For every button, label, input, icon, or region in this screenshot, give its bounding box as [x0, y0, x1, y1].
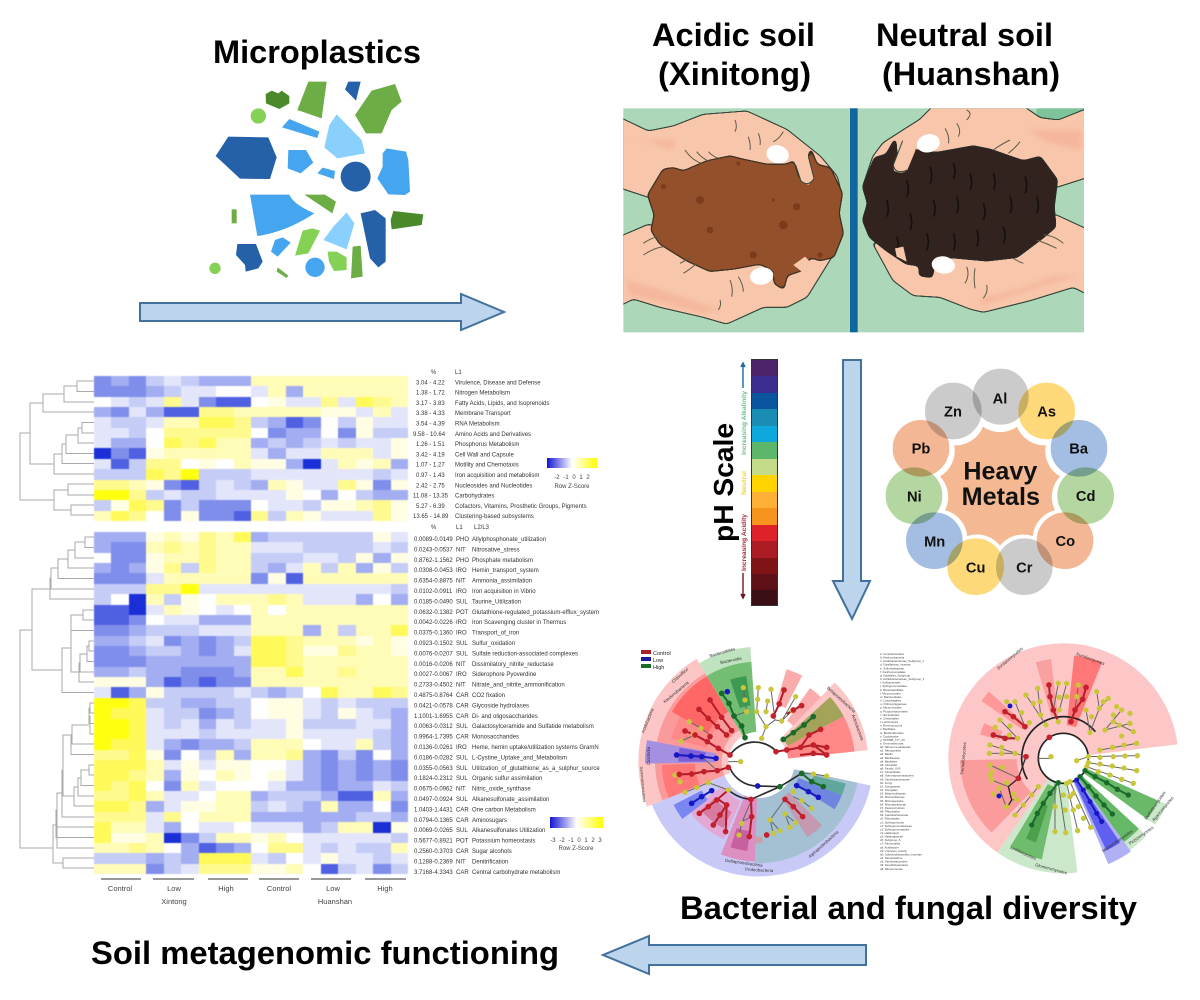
heatmap row labels: subsystems: CO2 fixation: [472, 693, 505, 699]
heatmap row labels: L1: L1: [456, 525, 463, 531]
heatmap row labels: subsystems: Alkanesulfonates Utilization: [472, 828, 545, 834]
heatmap bottom block: subsystem levels: [93, 531, 409, 875]
heatmap row labels: subsystems: 1.0403-1.4431: [414, 807, 453, 813]
cladogram: sector labels: Proteobacteria: [745, 867, 774, 873]
cladogram: sector labels: Bacteroidia: [720, 655, 743, 665]
taxa key list: c7: Nitrosotalea: [880, 842, 900, 846]
taxa key list: b0: Fungi: [880, 781, 892, 785]
taxa key list: c: Acidobacteriaceae_Subgroup_1: [880, 659, 924, 663]
taxa key list: b9: Caulobacteraceae: [880, 813, 909, 817]
metal symbols: Al: [993, 391, 1007, 407]
taxa key list: b7: Pedomicrobium: [880, 806, 905, 810]
heatmap row labels: subsystems: 0.4875-0.8764: [414, 693, 453, 699]
heatmap row labels: subsystems: SUL: [456, 724, 468, 730]
heatmap row labels: subsystems: Potassium homeostasis: [472, 839, 535, 845]
taxa key list: c8: Acidibacter: [880, 845, 899, 849]
heatmap row labels: L1: 13.65 - 14.89: [413, 514, 449, 520]
heatmap row labels: subsystems: 0.0923-0.1502: [414, 641, 453, 647]
heatmap row labels: subsystems: NIT: [456, 547, 466, 553]
heatmap row labels: L1: %: [431, 525, 437, 531]
heatmap row labels: subsystems: 0.0675-0.0962: [414, 787, 453, 793]
heatmap group axis and labels: Control: [108, 884, 132, 893]
heatmap row labels: subsystems: Transport_of_iron: [472, 631, 519, 637]
heatmap row labels: subsystems: 0.6354-0.8875: [414, 579, 453, 585]
heatmap row labels: subsystems: SUL: [456, 797, 468, 803]
neutral label: Neutral: [741, 471, 748, 495]
arrow: soil to bacterial diversity: [833, 360, 870, 619]
heatmap row labels: subsystems: Ammonia_assimilation: [472, 579, 532, 585]
heatmap group axis and labels: High: [218, 884, 234, 893]
taxa key list: a0: Nitrosomonadaceae: [880, 745, 911, 749]
heatmap row labels: subsystems: Siderophore Pyoverdine: [472, 672, 537, 678]
heatmap row labels: subsystems: CAR: [456, 703, 469, 709]
taxa key list: z: Gemmatimonas: [880, 742, 904, 746]
heatmap row labels: subsystems: Sulfate reduction-associated complexes: [472, 651, 578, 657]
heatmap row labels: subsystems: Allylphosphonate_utilization: [472, 537, 546, 543]
heatmap row labels: subsystems: 0.2560-0.3703: [414, 849, 453, 855]
heatmap row labels: L1: 3.04 - 4.22: [416, 380, 445, 386]
taxa key list: v: Bacillales: [880, 727, 896, 731]
taxa key list: k: Rhodospirillales: [880, 688, 904, 692]
heatmap row labels: subsystems: Organic sulfur assimilation: [472, 776, 542, 782]
taxa key list: c9: Unknown_Family: [880, 849, 907, 853]
soil: neutral: [863, 140, 1057, 277]
taxa key list: e: Sulfuritaleaceae: [880, 666, 904, 670]
heatmap row labels: subsystems: Sulfur_oxidation: [472, 641, 515, 647]
fungal cladogram sector labels: Tremellomycetes: [959, 742, 967, 775]
heatmap row labels: subsystems: 0.0186-0.0282: [414, 755, 453, 761]
taxa key list: b6: Micropepsaceae: [880, 802, 906, 806]
taxa key list: h: Acidobacteriaceae_Subgroup_3: [880, 677, 925, 681]
heatmap row labels: subsystems: Alkanesulfonate_assimilation: [472, 797, 549, 803]
cladogram: sector labels: Bacteroidetes: [709, 646, 736, 658]
arrow: acidity down: [741, 573, 745, 598]
heatmap row labels: subsystems: SUL: [456, 651, 468, 657]
taxa key list: b: Ktedonobacteria: [880, 656, 905, 660]
heatmap row labels: subsystems: Taurine_Utilization: [472, 599, 521, 605]
heatmap row labels: subsystems: CAR: [456, 807, 469, 813]
heatmap row labels: subsystems: One carbon Metabolism: [472, 807, 536, 813]
taxa key list: a5: Clostridia: [880, 763, 897, 767]
heatmap row labels: subsystems: 0.9964-1.7395: [414, 735, 453, 741]
heatmap row labels: L1: 0.97 - 1.43: [416, 473, 445, 479]
arrow: diversity to soil functioning: [603, 936, 866, 974]
heatmap row labels: L1: 3.38 - 4.33: [416, 411, 445, 417]
fungal cladogram sector labels: Mortierellomycetes: [1101, 829, 1134, 853]
cladogram: sector labels: Deltaproteobacteria: [725, 858, 764, 868]
cladogram: bacterial diversity: [647, 651, 869, 873]
diagram: heavy metals ring: [885, 368, 1115, 596]
heatmap row labels: subsystems: IRO: [456, 589, 467, 595]
heatmap row labels: subsystems: Denitrification: [472, 859, 508, 865]
taxa key list: n: Cytophagales: [880, 699, 901, 703]
taxa key list: c3: Sphingomonadales: [880, 827, 910, 831]
heatmap row labels: L1: Membrane Transport: [455, 411, 511, 417]
heatmap row labels: subsystems: IRO: [456, 672, 467, 678]
cladogram: sector labels: [639, 646, 865, 873]
heatmap group axis and labels: Control: [267, 884, 291, 893]
taxa key list: b4: Microscillaceae: [880, 795, 905, 799]
fungal cladogram sector labels: Pezizomycetes: [1128, 825, 1154, 846]
pH colour bar: [751, 359, 778, 606]
heatmap row labels: subsystems: Iron Scavenging cluster in Thermus: [472, 620, 566, 626]
metal symbols: Pb: [912, 442, 930, 458]
metal symbols: Cr: [1016, 561, 1033, 577]
heatmap row labels: subsystems: Monosaccharides: [472, 735, 519, 741]
heading: acidic soil: Acidic soil: [652, 17, 815, 53]
taxa key list: b3: Beijerinckiaceae: [880, 792, 906, 796]
heading: Huanshan: (Huanshan): [882, 56, 1060, 92]
heatmap row labels: L1: 5.27 - 6.39: [416, 504, 445, 510]
heatmap row labels: subsystems: SUL: [456, 766, 468, 772]
metal symbols: Zn: [944, 405, 962, 421]
heatmap row labels: L1: 1.38 - 1.72: [416, 391, 445, 397]
heatmap row labels: L1: 1.07 - 1.27: [416, 463, 445, 469]
taxa key list: l: Myxococcales: [880, 691, 901, 695]
heatmap row labels: subsystems: 0.0069-0.0265: [414, 828, 453, 834]
heading: soil metagenomic functioning: Soil metagenomic functioning: [91, 935, 559, 971]
heatmap row labels: subsystems: 0.1288-0.2369: [414, 859, 453, 865]
legend: control: Control: [653, 651, 671, 657]
heading: Xinitong: (Xinitong): [658, 56, 811, 92]
metal symbols: Co: [1056, 534, 1075, 550]
heatmap row labels: L1: 1.26 - 1.51: [416, 442, 445, 448]
taxa key list: a3: Bacillaceae: [880, 756, 900, 760]
left finger and nails: [788, 145, 814, 185]
taxa key list: d: Gaiellaceae_Incertae: [880, 663, 911, 667]
legend: low: Low: [653, 658, 663, 664]
heatmap row labels: subsystems: Galactosylceramide and Sulfatide metabolism: [472, 724, 594, 730]
heatmap row labels: subsystems: PHO: [456, 558, 469, 564]
taxa key list: c4: Haliangium: [880, 831, 900, 835]
taxa key list: d1: Pseudolabrys: [880, 856, 903, 860]
heatmap row labels: subsystems: NIT: [456, 579, 466, 585]
heading: neutral soil: Neutral soil: [876, 17, 1053, 53]
heatmap row labels: subsystems: 0.0497-0.0924: [414, 797, 453, 803]
heatmap row labels: subsystems: 0.0063-0.0312: [414, 724, 453, 730]
increasing alkalinity label: Increasing Alkalinity: [741, 391, 748, 455]
colour key: bottom heatmap: -3 -2 -1 0 1 2 3: [550, 838, 602, 844]
heatmap row labels: L1: Fatty Acids, Lipids, and Isoprenoids: [455, 401, 549, 407]
cladogram legend: [641, 650, 671, 671]
heatmap row labels: L1: L1: [455, 370, 462, 376]
heatmap row labels: subsystems: Glutathione-regulated_potassium-efflux_system: [472, 610, 599, 616]
heatmap row labels: subsystems: Dissimilatory_nitrite_reductase: [472, 662, 554, 668]
taxa key list: c6: Subgroup_6: [880, 838, 901, 842]
taxa key list: a: Coriobacteriales: [880, 652, 905, 656]
heatmap row labels: subsystems: CAR: [456, 735, 469, 741]
branches: [681, 688, 827, 835]
heatmap row labels: subsystems: 0.8762-1.1562: [414, 558, 453, 564]
heatmap row labels: L1: 3.42 - 4.19: [416, 452, 445, 458]
taxa key list: j: Sphingomonadales: [879, 684, 908, 688]
heatmap row labels: subsystems: 0.2733-0.4502: [414, 683, 453, 689]
heatmap row labels: subsystems: 0.0102-0.0911: [414, 589, 453, 595]
taxa key list: g: Gaiellales_Subgroup: [880, 673, 910, 677]
colour key: top heatmap: -2 -1 0 1 2: [554, 475, 590, 481]
taxa key list: c2: Sphingomonadaceae: [880, 824, 912, 828]
heatmap row labels: L1: Nitrogen Metabolism: [455, 391, 510, 397]
hand creases: [643, 110, 1063, 310]
taxa key list: c5: Haliangiaceae: [880, 835, 903, 839]
heavy metals label: Heavy: [963, 457, 1037, 485]
fungal cladogram sector labels: Sordariomycetes: [996, 646, 1024, 671]
heatmap row labels: L1: 3.17 - 3.83: [416, 401, 445, 407]
heatmap row labels: subsystems: 1.1001-1.6955: [414, 714, 453, 720]
heatmap row labels: subsystems: Aminosugars: [472, 818, 507, 824]
heatmap row labels: subsystems: Sugar alcohols: [472, 849, 512, 855]
colour key: bottom heatmap: Row Z-Score: [558, 846, 594, 852]
heatmap row labels: subsystems: 3.7168-4.3343: [414, 870, 453, 876]
heatmap row labels: L1: Iron acquisition and metabolism: [455, 473, 539, 479]
heatmap row labels: subsystems: NIT: [456, 787, 466, 793]
soil: acidic: [648, 150, 843, 288]
metal symbols: Ni: [907, 489, 922, 505]
heatmap row labels: subsystems: Phosphate metabolism: [472, 558, 533, 564]
cladogram: sector labels: Gemmatimonadetes: [639, 766, 647, 803]
fungal cladogram sector labels: [959, 646, 1175, 875]
heatmap row labels: subsystems: 0.0076-0.0207: [414, 651, 453, 657]
taxa key list: o: Chitinophagaceae: [880, 702, 907, 706]
heatmap row labels: L1: Nucleosides and Nucleotides: [455, 483, 532, 489]
cladogram: sector labels: Chloroflexi: [671, 667, 689, 684]
cladogram: fungal diversity: [910, 605, 1200, 911]
dendrogram: top heatmap rows: [20, 381, 94, 515]
heatmap row labels: subsystems: CAR: [456, 870, 469, 876]
colour key: top heatmap: Row Z-Score: [554, 484, 590, 490]
heatmap row labels: subsystems: POT: [456, 610, 469, 616]
colour key: top heatmap: [547, 458, 597, 490]
heatmap row labels: subsystems: IRO: [456, 620, 467, 626]
heatmap group axis and labels: Low: [167, 884, 181, 893]
heatmap row labels: subsystems: SUL: [456, 641, 468, 647]
pH scale: [708, 359, 778, 606]
cladogram: sector labels: Betaproteobacteria: [826, 685, 857, 714]
taxa key list: c1: Sphingomonas: [880, 820, 904, 824]
heatmap row labels: subsystems: 0.0421-0.0578: [414, 703, 453, 709]
heatmap row labels: L1: %: [431, 370, 437, 376]
heatmap row labels: subsystems: Iron acquisition in Vibrio: [472, 589, 536, 595]
heatmap row labels: subsystems: NIT: [456, 683, 466, 689]
taxa key list: a7: Clostridiales: [880, 770, 901, 774]
heatmap row labels: subsystems: 0.0185-0.0490: [414, 599, 453, 605]
cladogram: sector labels: Alphaproteobacteria: [807, 829, 840, 859]
heatmap row labels: subsystems: Glycoside hydrolases: [472, 703, 529, 709]
heatmap row labels: subsystems: NIT: [456, 662, 466, 668]
heatmap group axis and labels: [101, 879, 406, 906]
taxa key list: s: Clostridiales: [880, 716, 899, 720]
taxa key list: t: Lachnospira: [880, 720, 899, 724]
heading: bacterial and fungal diversity: Bacterial and fungal diversity: [680, 890, 1137, 926]
legend: high: High: [653, 665, 664, 671]
heavy metals label: Metals: [962, 483, 1040, 511]
heatmap group axis and labels: Xintong: [161, 897, 187, 906]
taxa key list: a8: Gammaproteobacteria: [880, 774, 914, 778]
metal symbols: Mn: [924, 534, 945, 550]
heatmap row labels: subsystems: 0.0308-0.0453: [414, 568, 453, 574]
heatmap row labels: subsystems: L-Cystine_Uptake_and_Metabolism: [472, 755, 567, 761]
taxa key list: a4: Bacillales: [880, 759, 898, 763]
branches: [989, 683, 1137, 833]
title: microplastics: Microplastics: [213, 34, 421, 70]
heatmap row labels: subsystems: NIT: [456, 859, 466, 865]
fungal cladogram sector labels: Agaricomycetes: [1151, 796, 1175, 822]
fungal cladogram sector labels: Eurotiomycetes: [1076, 651, 1105, 666]
heatmap row labels: subsystems: Hemin_transport_system: [472, 568, 539, 574]
pH scale label: pH Scale: [708, 423, 739, 542]
heatmap group axis and labels: Low: [326, 884, 340, 893]
nodes: [675, 688, 827, 835]
taxa key list: c0: Rhizobiales: [880, 817, 900, 821]
heatmap row labels: L1: 2.42 - 2.75: [416, 483, 445, 489]
heatmap row labels: subsystems: 0.0355-0.0563: [414, 766, 453, 772]
heatmap row labels: subsystems: Heme, hemin uptake/utilization systems GramN: [472, 745, 599, 751]
cladogram: sector labels: Acidobacteria: [640, 707, 655, 734]
heatmap group axis and labels: High: [377, 884, 393, 893]
heatmap row labels: subsystems: PHO: [456, 537, 469, 543]
taxa key list: b5: Micropepsales: [880, 799, 904, 803]
heatmap row labels: subsystems: 0.5677-0.8921: [414, 839, 453, 845]
heatmap row labels: subsystems: SUL: [456, 755, 468, 761]
taxa key list: y: Sh765B_TzT_29: [880, 738, 905, 742]
heatmap row labels: L1: 11.08 - 13.35: [413, 494, 449, 500]
metal symbols: As: [1037, 405, 1056, 421]
metal symbols: Ba: [1069, 442, 1089, 458]
heatmap row labels: L1: Carbohydrates: [455, 494, 494, 500]
taxa key list: d3: Desulfobacterales: [880, 863, 909, 867]
heatmap row labels: subsystems: IRO: [456, 568, 467, 574]
fungal cladogram sector labels: Leotiomycetes: [1010, 845, 1037, 861]
heatmap row labels: subsystems: Nitrosative_stress: [472, 547, 520, 553]
fungal cladogram sector labels: Glomeromycetes: [1035, 862, 1068, 875]
heatmap row labels: L1: Motility and Chemotaxis: [455, 463, 519, 469]
illustration: hands holding acidic and neutral soil: [613, 100, 1093, 332]
heatmap row labels: L1: Cofactors, Vitamins, Prosthetic Groups, Pigments: [455, 504, 587, 510]
heatmap row labels: subsystems: Central carbohydrate metabolism: [472, 870, 560, 876]
heatmap row labels: L1: Cell Wall and Capsule: [455, 452, 514, 458]
cladogram: sector labels: Clostridia: [646, 746, 651, 765]
heatmap row labels: subsystems: CAR: [456, 693, 469, 699]
heatmap row labels: L1: RNA Metabolism: [455, 422, 500, 428]
heatmap row labels: subsystems: 0.0375-0.1360: [414, 631, 453, 637]
increasing acidity label: Increasing Acidity: [741, 514, 748, 571]
heatmap row labels: subsystems: IRO: [456, 631, 467, 637]
heatmap row labels: subsystems: CAR: [456, 849, 469, 855]
heatmap row labels: subsystems: 0.0089-0.0149: [414, 537, 453, 543]
heatmap row labels: subsystems: IRO: [456, 745, 467, 751]
hand outlines: [613, 100, 1093, 323]
taxa key list: a6: Family_XVII: [880, 767, 901, 771]
heatmap row labels: subsystems: SUL: [456, 828, 468, 834]
taxa key list: w: Burkholderiales: [880, 731, 904, 735]
taxa key list: u: Ruminococcus: [880, 724, 903, 728]
taxa key list: r: Nocardioides: [880, 713, 900, 717]
heatmap row labels: L1: Clustering-based subsystems: [455, 514, 534, 520]
heatmap top block: L1 subsystems: [93, 375, 408, 522]
taxa key list: a1: Nitrospirales: [880, 749, 901, 753]
colour key: bottom heatmap: [550, 817, 603, 852]
taxa key list: d0: Solirubrobacterales_Incertae: [880, 852, 922, 856]
heatmap row labels: subsystems: SUL: [456, 599, 468, 605]
metal symbols: Cd: [1076, 489, 1095, 505]
taxa key list: a2: Bacilli: [880, 752, 893, 756]
taxa key list: x: Caulobacter: [880, 734, 899, 738]
cladogram: sector labels: Ktedonobacteria: [662, 680, 690, 704]
heatmap group axis and labels: Huanshan: [318, 897, 352, 906]
heatmap row labels: subsystems: Di- and oligosaccharides: [472, 714, 538, 720]
heatmap row labels: subsystems: SUL: [456, 776, 468, 782]
taxa key list: f: Xanthomonadales: [880, 670, 906, 674]
taxa key list: b2: Dongiales: [880, 788, 898, 792]
heatmap row labels: subsystems: 0.0632-0.1382: [414, 610, 453, 616]
heatmap row labels: L1: Virulence, Disease and Defense: [455, 380, 541, 386]
taxa key list: b1: Dongiaceae: [880, 784, 901, 788]
taxa key list: b8: Rhizobiales: [880, 810, 900, 814]
taxa key list: m: Bacteroidales: [880, 695, 902, 699]
illustration: microplastic fragments: [209, 82, 423, 278]
heatmap row labels: subsystems: 0.0042-0.0226: [414, 620, 453, 626]
metal symbols: [907, 391, 1095, 577]
heatmap row labels: subsystems: POT: [456, 839, 469, 845]
heatmap row labels: subsystems: 0.0027-0.0067: [414, 672, 453, 678]
taxa key list: q: Propionibacteriales: [880, 709, 908, 713]
arrow: microplastics to soil: [140, 294, 504, 330]
heatmap row labels: subsystems: Utilization_of_glutathione_as_a_sulphur_source: [472, 766, 600, 772]
cladogram: sector labels: Actinobacteria: [851, 714, 865, 742]
heatmap row labels: subsystems: CAR: [456, 714, 469, 720]
heatmap row labels: L1: 3.54 - 4.39: [416, 422, 445, 428]
arrow: alkalinity up: [741, 363, 745, 388]
heatmap row labels: L1: Phosphorus Metabolism: [455, 442, 519, 448]
taxa key list: d2: Xanthobacterales: [880, 860, 908, 864]
heatmap row labels: subsystems: Nitrate_and_nitrite_ammonification: [472, 683, 565, 689]
taxa key list: a9: Xanthobacteraceae: [880, 777, 910, 781]
heatmap row labels: subsystems: 0.1824-0.2312: [414, 776, 453, 782]
heatmap row labels: subsystems: CAR: [456, 818, 469, 824]
heavy metals label: [962, 457, 1040, 511]
nodes: [989, 683, 1137, 833]
heatmap row labels: subsystems: 0.0794-0.1365: [414, 818, 453, 824]
heatmap row labels: subsystems: 0.0136-0.0261: [414, 745, 453, 751]
dendrogram: bottom heatmap rows: [20, 537, 94, 868]
heatmap row labels: subsystems: 0.0016-0.0206: [414, 662, 453, 668]
heatmap row labels: subsystems: Nitric_oxide_synthase: [472, 787, 531, 793]
taxa key list: i: Solibacterales: [880, 681, 901, 685]
hand fills: [613, 100, 1093, 323]
taxa key list: d4: Nitrosomonas: [880, 867, 903, 871]
heatmap row labels: L1: 9.58 - 10.64: [413, 432, 446, 438]
heatmap row labels: L1: Amino Acids and Derivatives: [455, 432, 531, 438]
heatmap row labels: subsystems: 0.0243-0.0537: [414, 547, 453, 553]
metal symbols: Cu: [966, 561, 985, 577]
heatmap row labels: L1: L2/L3: [474, 525, 490, 531]
fungal cladogram sector labels: Dothideomycetes: [1143, 790, 1167, 821]
taxa key list: p: Micrococcales: [880, 706, 902, 710]
